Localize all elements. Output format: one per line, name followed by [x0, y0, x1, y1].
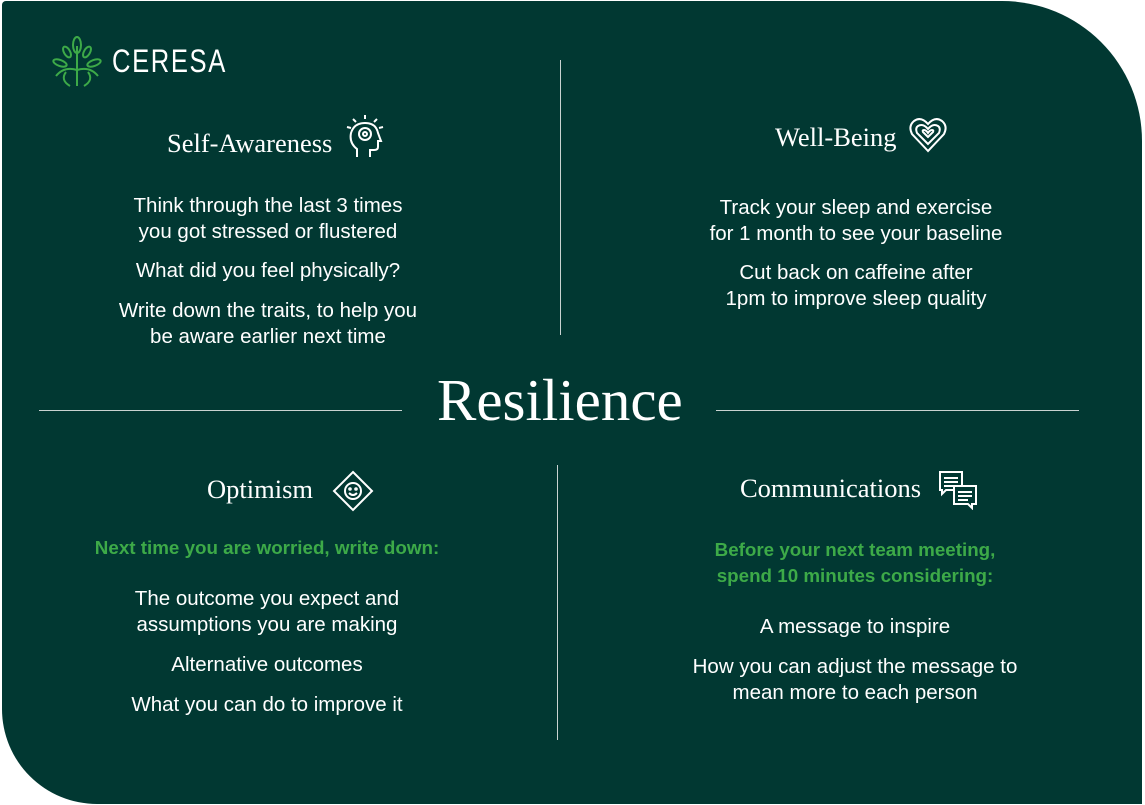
panel: communications: [693, 471, 1017, 704]
panel: self-awareness: What did you feel physically?: [136, 259, 400, 282]
heading: Communications: [740, 473, 921, 503]
title: Resilience: Resilience: [437, 367, 683, 433]
panel: optimism: [95, 470, 439, 716]
text: The outcome you expect and: [135, 587, 399, 610]
text: [135, 587, 399, 636]
text: you got stressed or flustered: [139, 220, 397, 243]
text: A message to inspire: [760, 615, 950, 638]
panel: self-awareness: [119, 115, 417, 348]
text: Think through the last 3 times: [134, 194, 402, 217]
panel: self-awareness: be aware earlier next time: [150, 325, 386, 348]
logo: [52, 36, 227, 87]
icon: smiley diamond: [332, 470, 374, 512]
text: [134, 194, 402, 243]
text: assumptions you are making: [137, 613, 397, 636]
green prompt: spend 10 minutes considering:: [717, 565, 993, 586]
icon: heart: [909, 118, 947, 152]
text: Track your sleep and exercise: [720, 196, 992, 219]
heading: Optimism: [207, 474, 313, 504]
panel: optimism: What you can do to improve it: [131, 693, 403, 716]
panel: well-being: 1pm to improve sleep quality: [726, 287, 986, 310]
text: [710, 196, 1002, 245]
green prompt: Before your next team meeting,: [715, 539, 995, 560]
panel: self-awareness: Write down the traits, to help you: [119, 299, 417, 322]
heading: Self-Awareness: [167, 128, 332, 158]
green prompt: [715, 539, 995, 586]
panel: well-being: Cut back on caffeine after: [739, 261, 973, 284]
divider lines: [560, 60, 561, 335]
panel: optimism: Alternative outcomes: [171, 653, 363, 676]
icon: chat bubbles: [939, 471, 977, 510]
panel: communications: mean more to each person: [732, 681, 978, 704]
panel: communications: How you can adjust the message to: [693, 655, 1017, 678]
green prompt: Next time you are worried, write down:: [95, 537, 439, 558]
logo: CERESA: [112, 43, 227, 79]
heading: Well-Being: [775, 122, 897, 152]
icon: head: [346, 115, 384, 157]
text: for 1 month to see your baseline: [710, 222, 1002, 245]
panel: well-being: [710, 118, 1002, 310]
